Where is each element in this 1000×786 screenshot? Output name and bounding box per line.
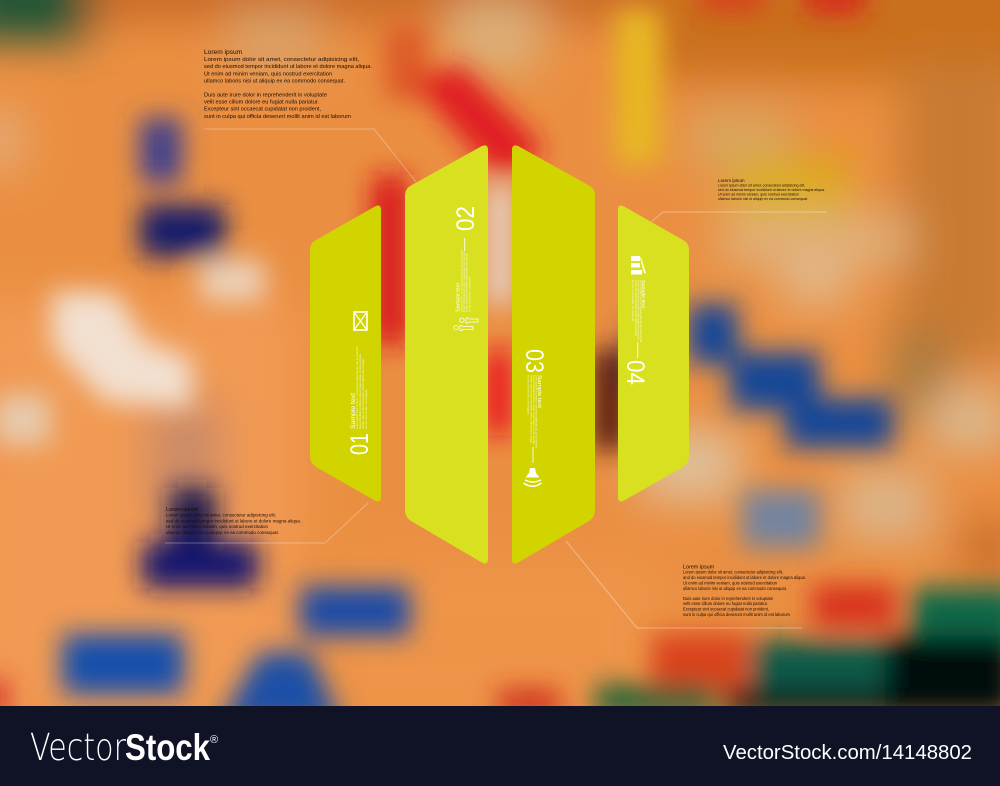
panel 01 sample text: Sample text [350, 393, 357, 429]
footer image id: VectorStock.com/14148802 [723, 742, 972, 764]
callout 04 text: Lorem ipsum [718, 178, 745, 183]
icon: two figures [454, 318, 478, 330]
callout 01 text [166, 507, 301, 535]
panel 02 body text: veniam, quis nostrud exercitation ullamco laboris nisi ut aliquip [466, 253, 469, 312]
callout 03 text: Lorem ipsum dolor sit amet, consectetur adipisicing elit, [683, 570, 783, 575]
panel 04 [618, 206, 689, 501]
callout 02 text: sed do eiusmod tempor incididunt ut labore et dolore magna aliqua. [204, 64, 372, 70]
panel 04 separator [636, 342, 639, 358]
callout 03 text: Lorem ipsum [683, 565, 715, 571]
panel 04 body text [631, 280, 642, 343]
callout 03 text: ullamco laboris nisi ut aliquip ex ea commodo consequat. [683, 586, 787, 591]
callout 03 text: sunt in culpa qui officia deserunt mollit anim id est laborum [683, 612, 790, 617]
panel 01 number: 01 [346, 433, 374, 455]
callout 01 text: sed do eiusmod tempor incididunt ut labore et dolore magna aliqua. [166, 518, 301, 523]
footer logo: ® [210, 734, 218, 746]
footer bar [0, 706, 1000, 786]
panel 01 [310, 206, 381, 501]
callout 02 text: Lorem ipsum [204, 49, 243, 56]
panel 01 body text: Lorem ipsum dolor sit amet, consectetur adipisicing elit, sed do eiusmod [356, 346, 359, 429]
leader line: callout 02 [204, 129, 417, 183]
panel 01 body text: veniam, quis nostrud exercitation ullamco laboris nisi ut aliquip [362, 358, 365, 429]
panel 04 body text: tempor incididunt ut labore et dolore magna aliqua. Ut enim ad minim [636, 280, 639, 340]
panel 03 body text: ex ea commodo consequat. [527, 375, 530, 415]
panel 04 body text: veniam, quis nostrud exercitation ullamco laboris nisi ut aliquip [634, 280, 637, 337]
panel 04 body text: Lorem ipsum dolor sit amet, consectetur adipisicing elit, sed do eiusmod [639, 280, 642, 343]
panel 03 [512, 145, 595, 563]
panel 02 sample text: Sample text [456, 282, 462, 312]
panel 04 sample text: Sample text [641, 280, 646, 309]
panel 02 body text: Lorem ipsum dolor sit amet, consectetur adipisicing elit, sed do eiusmod [460, 249, 464, 312]
icon: envelope [354, 312, 367, 330]
callout 04 text: Ut enim ad minim veniam, quis nostrud exercitation [718, 192, 799, 196]
panel 02 number: 02 [452, 206, 480, 231]
callout 01 text: Ut enim ad minim veniam, quis nostrud exercitation [166, 524, 268, 529]
panel 01 body text: tempor incididunt ut labore et dolore magna aliqua. Ut enim ad minim [359, 354, 362, 429]
callout 01 text: Lorem ipsum dolor sit amet, consectetur adipisicing elit, [166, 513, 276, 518]
leader line: callout 03 [566, 541, 802, 628]
callout 02 text: Duis aute irure dolor in reprehenderit in voluptate [204, 93, 327, 99]
panel 03 body text: tempor incididunt ut labore et dolore magna aliqua. Ut enim ad minim [532, 375, 535, 445]
panel 02 shape [405, 145, 488, 563]
panel 03 body text: veniam, quis nostrud exercitation ullamco laboris nisi ut aliquip [529, 375, 532, 444]
leader line: callout 04 [650, 212, 827, 223]
callout 02 text: sunt in culpa qui officia deserunt mollit anim id est laborum [204, 114, 352, 120]
callout 04 text: Lorem ipsum dolor sit amet, consectetur adipisicing elit, [718, 183, 805, 187]
panel 02 body text: tempor incididunt ut labore et dolore magna aliqua. Ut enim ad minim [463, 252, 466, 312]
callout 02 text [204, 49, 372, 120]
panel 02 body text [460, 249, 471, 312]
callout 04 text [718, 178, 825, 201]
callout 03 text: and do eiusmod tempor incididunt ut labore et dolore magna aliqua. [683, 575, 806, 580]
footer logo: Vector [30, 726, 127, 769]
callout 02 text: ullamco laboris nisi ut aliquip ex ea commodo consequat. [204, 78, 345, 84]
callout 03 text: Ut enim ad minim veniam, quis nostrud exercitation [683, 581, 778, 586]
callout 02 text: Ut enim ad minim veniam, quis nostrud exercitation [204, 71, 332, 77]
panel 02 [405, 145, 488, 563]
panel 03 body text: Lorem ipsum dolor sit amet, consectetur adipisicing elit, sed do eiusmod [534, 375, 538, 449]
panel 02 separator [463, 238, 466, 251]
panel 04 shape [618, 206, 689, 501]
footer logo [30, 726, 218, 769]
panel 03 number: 03 [520, 349, 548, 373]
panel 01 shape [310, 206, 381, 501]
icon: bar chart [631, 256, 646, 274]
panel 04 number: 04 [621, 360, 649, 385]
callout 03 text [683, 565, 806, 617]
panel 01 body text: ex ea commodo consequat. [365, 389, 368, 429]
panel 04 body text: ex ea commodo consequat. [631, 280, 634, 322]
callout 04 text: sed do eiusmod tempor incididunt ut labore et dolore magna aliqua. [718, 188, 825, 192]
panel 01 body text [356, 346, 368, 429]
callout 03 text: velit esse cillum dolore eu fugiat nulla pariatur. [683, 601, 768, 606]
leader line: callout 01 [165, 503, 368, 543]
panel 03 sample text: Sample text [536, 375, 542, 409]
callout 03 text: Duis aute irure dolor in reprehenderit in voluptate [683, 596, 774, 601]
footer logo: Stock [125, 727, 210, 768]
callout 01 text: ullamco laboris nisi ut aliquip ex ea commodo consequat. [166, 530, 279, 535]
callout 02 text: velit esse cillum dolore eu fugiat nulla pariatur. [204, 100, 319, 106]
callout 02 text: Lorem ipsum dolor sit amet, consectetur adipisicing elit, [204, 57, 360, 63]
callout 04 text: ullamco laboris nisi ut aliquip ex ea commodo consequat. [718, 197, 808, 201]
panel 03 body text [527, 375, 538, 449]
panel 02 body text: ex ea commodo consequat. [468, 276, 471, 312]
panel 03 shape [512, 145, 595, 563]
callout 03 text: Excepteur sint occaecat cupidatat non proident, [683, 607, 769, 612]
callout 02 text: Excepteur sint occaecat cupidatat non proident, [204, 107, 322, 113]
icon: bell [524, 468, 542, 486]
callout 01 text: Lorem ipsum [166, 507, 199, 513]
panel 03 separator [532, 447, 534, 463]
